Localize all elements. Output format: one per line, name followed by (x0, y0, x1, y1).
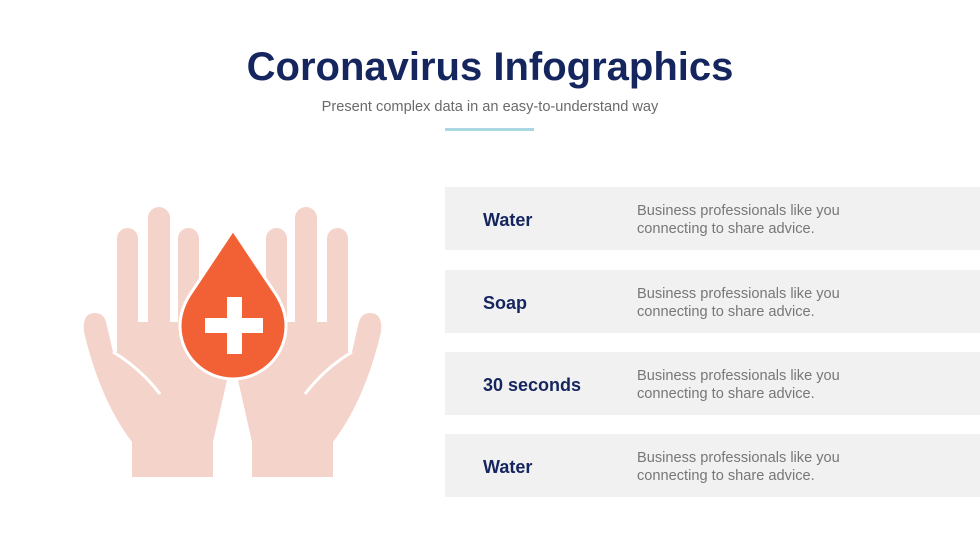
row: Soap: Business professionals like you (637, 286, 840, 302)
row: Soap (445, 270, 980, 333)
row: Soap: Soap (483, 293, 527, 313)
subtitle: Present complex data in an easy-to-understand way (322, 99, 658, 115)
row: Water 2 (445, 434, 980, 497)
title: Coronavirus Infographics (247, 45, 733, 89)
row: Water: connecting to share advice. (637, 221, 815, 237)
row: 30 seconds: connecting to share advice. (637, 386, 815, 402)
row: 30 seconds (445, 352, 980, 415)
icon: hands with blood drop (84, 207, 382, 477)
row: 30 seconds: 30 seconds (483, 375, 581, 395)
row: Water 2: connecting to share advice. (637, 468, 815, 484)
accent line (445, 128, 534, 131)
row: Water 2: Business professionals like you (637, 450, 840, 466)
row: Soap: connecting to share advice. (637, 304, 815, 320)
row: 30 seconds: Business professionals like you (637, 368, 840, 384)
row: Water 2: Water (483, 457, 532, 477)
row: Water: Water (483, 210, 532, 230)
row: Water (445, 187, 980, 250)
row: Water: Business professionals like you (637, 203, 840, 219)
